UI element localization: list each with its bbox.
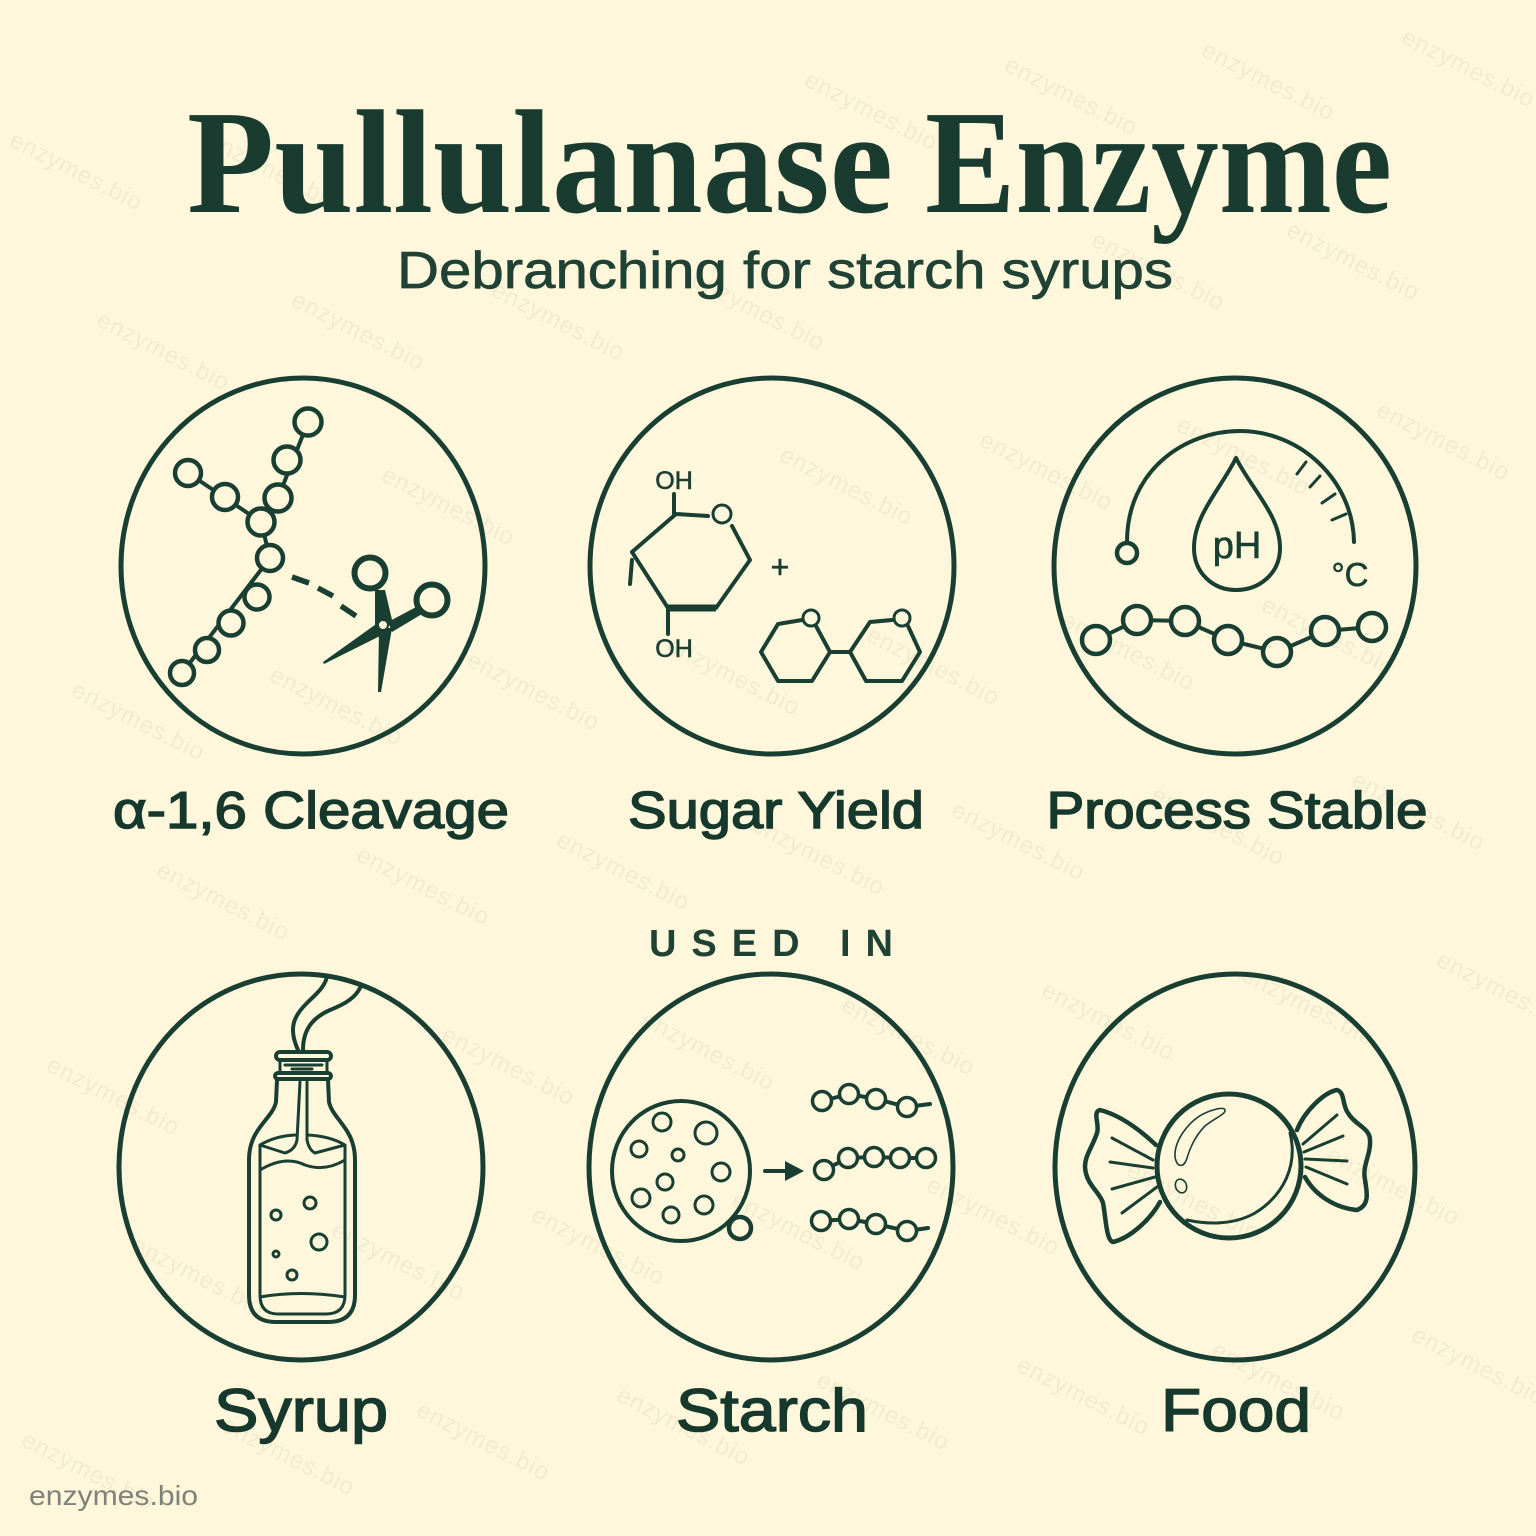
text: enzymes.bio bbox=[1322, 1141, 1464, 1232]
text: enzymes.bio bbox=[975, 426, 1117, 517]
text: enzymes.bio bbox=[687, 266, 829, 357]
label: Starch bbox=[676, 1377, 868, 1444]
text: enzymes.bio bbox=[437, 1021, 579, 1112]
text: enzymes.bio bbox=[1087, 226, 1229, 317]
icon: pH drop, temperature gauge and chain bbox=[1054, 378, 1416, 754]
label: α-1,6 Cleavage bbox=[113, 782, 509, 840]
text: enzymes.bio bbox=[527, 1201, 669, 1292]
text: enzymes.bio bbox=[67, 676, 209, 767]
panel: alpha-1,6 cleavage bbox=[113, 378, 509, 840]
icon: sugar molecules: + bbox=[771, 549, 789, 585]
text: enzymes.bio bbox=[552, 826, 694, 917]
label: Process Stable bbox=[1046, 782, 1428, 840]
text: enzymes.bio bbox=[637, 1006, 779, 1097]
text: enzymes.bio bbox=[1372, 396, 1514, 487]
text: enzymes.bio bbox=[265, 661, 407, 752]
text: enzymes.bio bbox=[1397, 23, 1536, 114]
footer: source: enzymes.bio bbox=[29, 1480, 198, 1511]
text: enzymes.bio bbox=[1147, 781, 1289, 872]
text: enzymes.bio bbox=[837, 991, 979, 1082]
label: Sugar Yield bbox=[628, 782, 924, 840]
text: enzymes.bio bbox=[662, 631, 804, 722]
text: enzymes.bio bbox=[775, 441, 917, 532]
text: enzymes.bio bbox=[812, 1366, 954, 1457]
text: enzymes.bio bbox=[462, 646, 604, 737]
panel: process stable bbox=[1046, 378, 1428, 840]
text: enzymes.bio bbox=[42, 1051, 184, 1142]
text: enzymes.bio bbox=[1012, 1351, 1154, 1442]
text: enzymes.bio bbox=[92, 306, 234, 397]
icon: wrapped candy bbox=[1055, 974, 1415, 1360]
icon: starch granule to chains bbox=[589, 974, 953, 1360]
text: enzymes.bio bbox=[17, 1426, 159, 1517]
label: Syrup bbox=[214, 1377, 388, 1444]
text: enzymes.bio bbox=[412, 1396, 554, 1487]
text: enzymes.bio bbox=[947, 796, 1089, 887]
title bbox=[187, 81, 1392, 245]
text: enzymes.bio bbox=[327, 1216, 469, 1307]
text: enzymes.bio bbox=[487, 276, 629, 367]
text: enzymes.bio bbox=[1172, 411, 1314, 502]
text: enzymes.bio bbox=[1037, 976, 1179, 1067]
text: enzymes.bio bbox=[1057, 606, 1199, 697]
text: enzymes.bio bbox=[1347, 766, 1489, 857]
icon: pH drop, temperature gauge and chain: pH bbox=[1213, 525, 1261, 567]
text: enzymes.bio bbox=[1197, 36, 1339, 127]
icon: syrup bottle bbox=[119, 974, 483, 1360]
text: enzymes.bio bbox=[1207, 1336, 1349, 1427]
text: enzymes.bio bbox=[1122, 1156, 1264, 1247]
text: enzymes.bio bbox=[747, 811, 889, 902]
text: enzymes.bio bbox=[800, 66, 942, 157]
icon: pH drop, temperature gauge and chain: °C bbox=[1331, 556, 1369, 593]
title: Pullulanase bbox=[187, 81, 893, 245]
text: enzymes.bio bbox=[5, 126, 147, 217]
text: enzymes.bio bbox=[217, 1411, 359, 1502]
text: enzymes.bio bbox=[287, 286, 429, 377]
text: enzymes.bio bbox=[202, 126, 344, 217]
icon: sugar molecules: OH bbox=[655, 635, 693, 663]
panel: sugar yield bbox=[590, 378, 954, 840]
panel: food bbox=[1055, 974, 1415, 1444]
text: enzymes.bio bbox=[127, 1231, 269, 1322]
icon: sugar molecules bbox=[590, 378, 954, 754]
icon: sugar molecules: OH bbox=[655, 467, 693, 495]
text: enzymes.bio bbox=[1257, 591, 1399, 682]
text: enzymes.bio bbox=[1282, 216, 1424, 307]
text: enzymes.bio bbox=[612, 1381, 754, 1472]
label: Food bbox=[1161, 1377, 1311, 1444]
panel: starch bbox=[589, 974, 953, 1444]
icon: branched chain with scissors bbox=[121, 378, 485, 754]
text: enzymes.bio bbox=[352, 841, 494, 932]
text: enzymes.bio bbox=[727, 1186, 869, 1277]
text: enzymes.bio bbox=[922, 1171, 1064, 1262]
text: enzymes.bio bbox=[377, 461, 519, 552]
text: enzymes.bio bbox=[1000, 51, 1142, 142]
text: enzymes.bio bbox=[1237, 961, 1379, 1052]
title: Enzyme bbox=[925, 81, 1392, 245]
text: enzymes.bio bbox=[152, 856, 294, 947]
section heading: used in: USED IN bbox=[649, 923, 893, 965]
subtitle: Debranching for starch syrups bbox=[397, 242, 1173, 300]
panel: syrup bbox=[119, 974, 483, 1444]
text: enzymes.bio bbox=[862, 621, 1004, 712]
